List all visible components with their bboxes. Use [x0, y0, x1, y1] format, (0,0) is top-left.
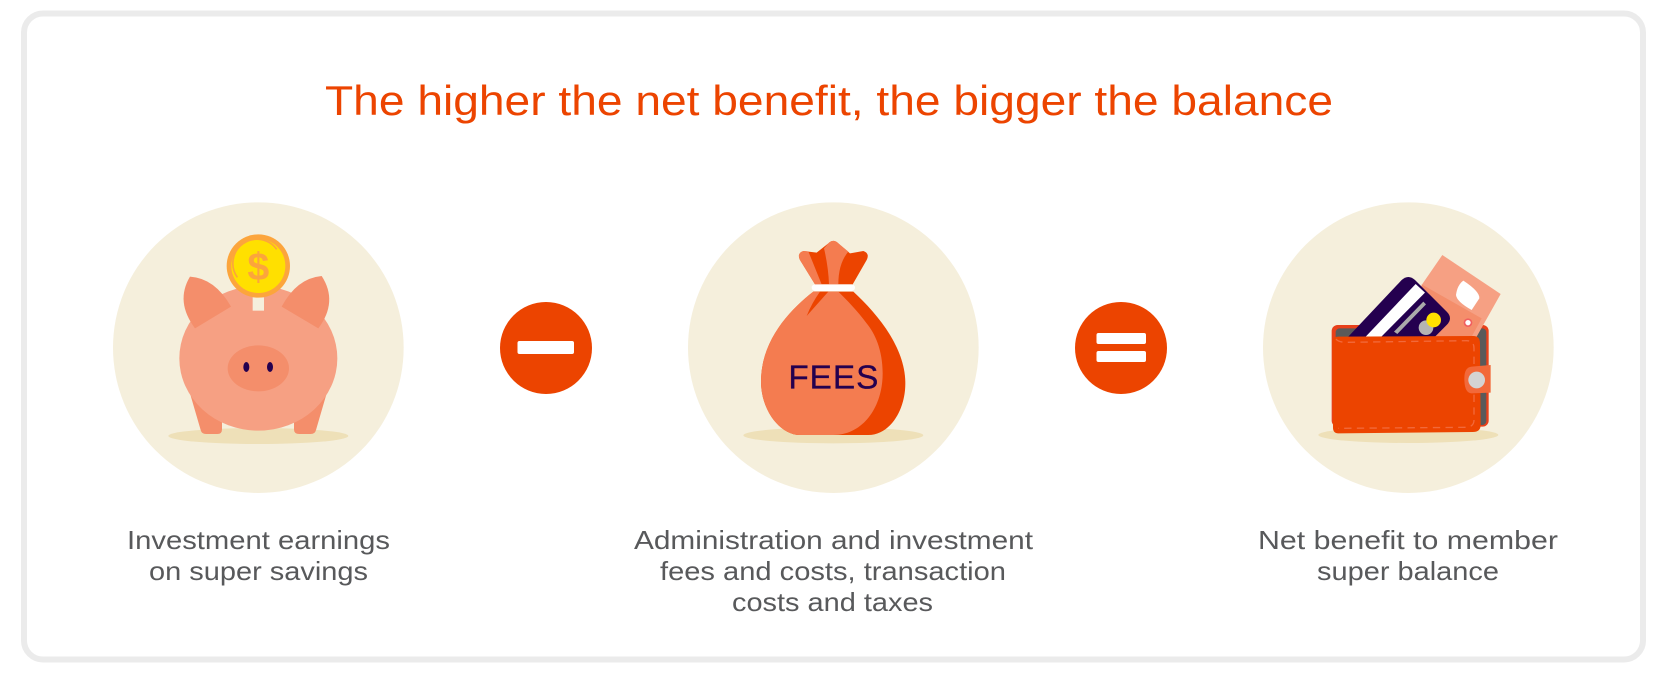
caption: investment earnings: on super savings: [149, 556, 368, 586]
icon: piggy bank: [113, 202, 404, 493]
caption: fees and costs: Administration and investment: [634, 525, 1034, 555]
caption: investment earnings: Investment earnings: [127, 525, 390, 555]
icon: fees money bag: [688, 202, 979, 493]
caption: fees and costs: fees and costs, transaction: [660, 556, 1006, 586]
fees label: FEES: [788, 359, 878, 396]
icon: minus sign: [500, 302, 592, 394]
caption: fees and costs: costs and taxes: [732, 587, 933, 617]
icon: equals sign: [1075, 302, 1167, 394]
title: The higher the net benefit, the bigger the balance: [325, 77, 1333, 124]
icon: wallet: [1263, 202, 1554, 493]
icon: piggy bank: $: [247, 245, 269, 289]
caption: net benefit: Net benefit to member: [1258, 525, 1558, 555]
caption: net benefit: super balance: [1317, 556, 1499, 586]
